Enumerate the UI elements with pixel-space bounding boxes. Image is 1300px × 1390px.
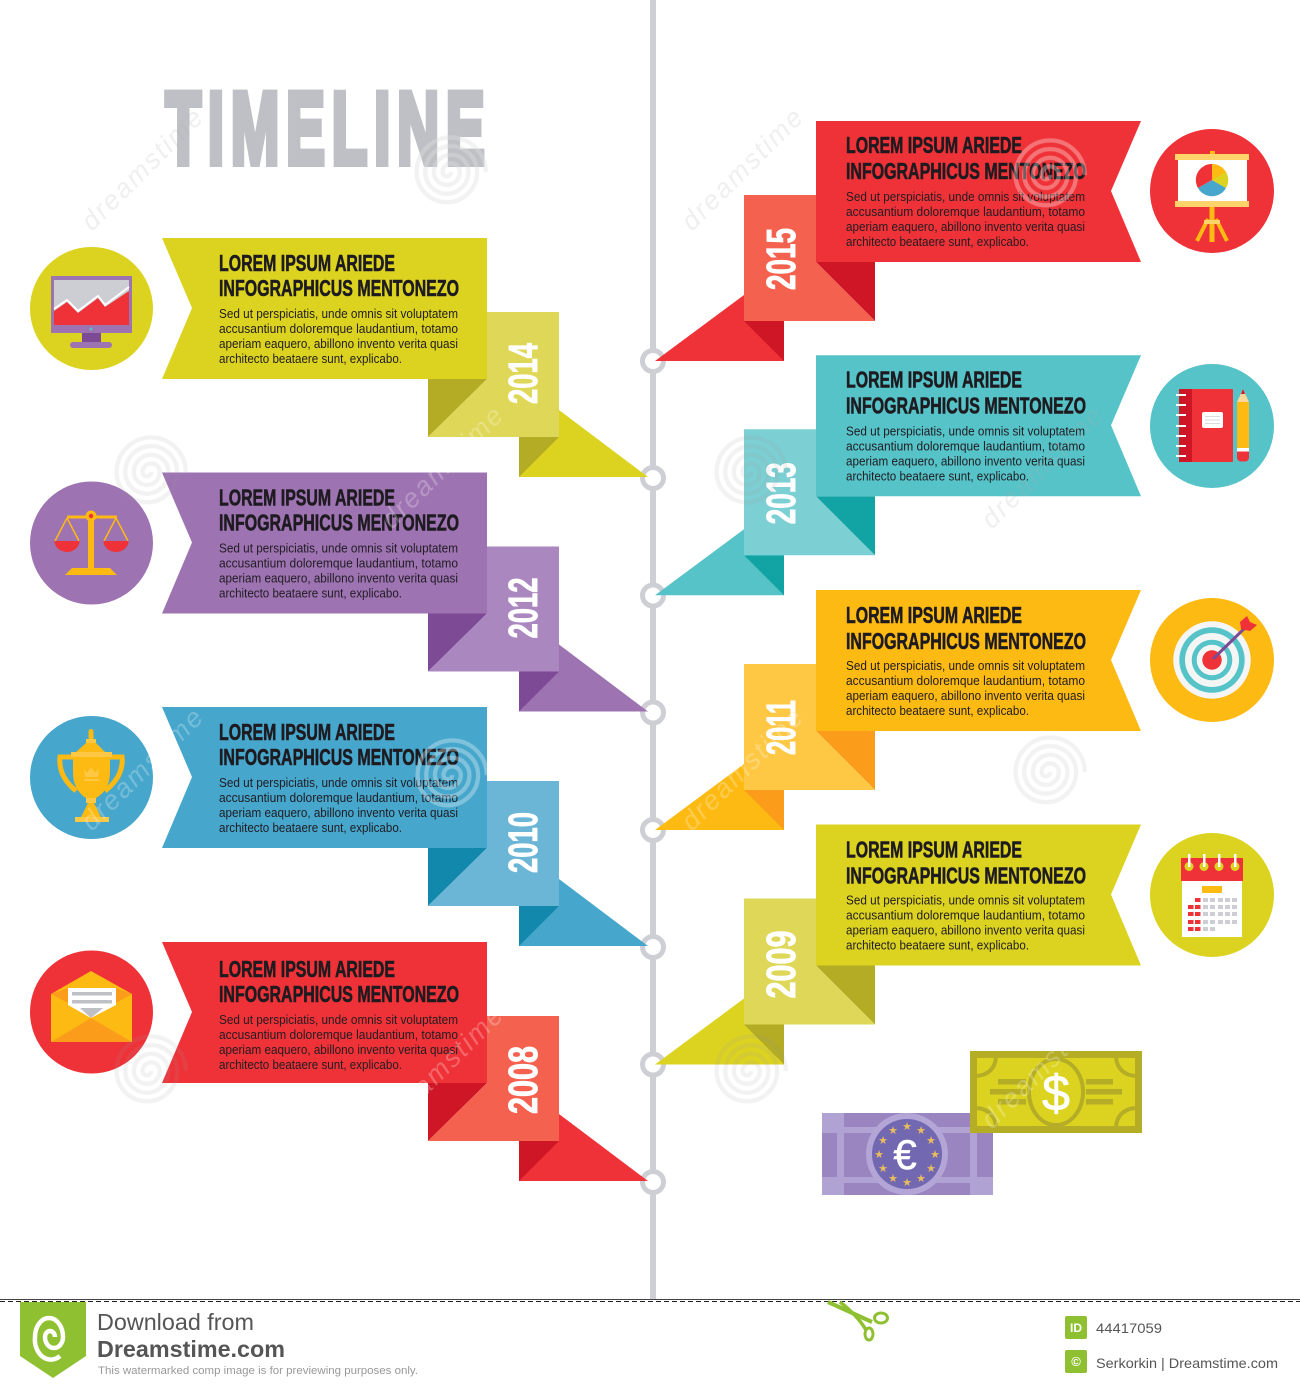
body text: aperiam eaquero, abillono invento verita quasi	[846, 924, 1085, 938]
icon: euro banknote: ★	[874, 1148, 884, 1161]
milestone 2011	[655, 590, 1141, 830]
icon: euro banknote: ★	[916, 1172, 926, 1185]
body text: Sed ut perspiciatis, unde omnis sit voluptatem	[846, 424, 1085, 438]
heading: LOREM IPSUM ARIEDE	[846, 602, 1022, 628]
icon: euro banknote: ★	[878, 1134, 888, 1147]
body text: architecto beataere sunt, explicabo.	[846, 235, 1029, 249]
year tab	[744, 664, 875, 790]
icon: calendar	[1150, 833, 1274, 957]
body text: aperiam eaquero, abillono invento verita quasi	[219, 806, 458, 820]
body text: architecto beataere sunt, explicabo.	[846, 938, 1029, 952]
body text: accusantium doloremque laudantium, totamo	[219, 322, 458, 336]
body text: architecto beataere sunt, explicabo.	[846, 469, 1029, 483]
year: 2009	[758, 930, 804, 998]
heading: INFOGRAPHICUS MENTONEZO	[846, 862, 1086, 888]
heading	[846, 836, 1086, 888]
heading	[219, 250, 459, 301]
icon: dollar banknote	[970, 1051, 1142, 1133]
icon: euro banknote: ★	[926, 1162, 936, 1175]
year tab	[744, 898, 875, 1024]
icon: envelope	[30, 950, 153, 1074]
icon: euro banknote: ★	[902, 1176, 912, 1189]
body text: architecto beataere sunt, explicabo.	[219, 586, 402, 600]
ribbon fold	[816, 966, 875, 1024]
icon: notebook and pencil	[1150, 364, 1274, 488]
image credit	[1065, 1350, 1278, 1373]
body text: accusantium doloremque laudantium, totamo	[219, 556, 458, 570]
watermark text: dreamstime	[675, 101, 810, 236]
milestone 2015	[655, 121, 1141, 361]
heading: LOREM IPSUM ARIEDE	[846, 366, 1022, 392]
ribbon tail	[519, 1114, 648, 1181]
body text	[846, 424, 1085, 483]
timeline nodes	[642, 350, 664, 1192]
ribbon fold	[816, 496, 875, 555]
year tab	[428, 781, 559, 906]
body text: Sed ut perspiciatis, unde omnis sit voluptatem	[219, 776, 458, 790]
heading: INFOGRAPHICUS MENTONEZO	[846, 628, 1086, 654]
icon: scales	[30, 482, 153, 604]
milestone 2009	[655, 824, 1141, 1064]
body text: Sed ut perspiciatis, unde omnis sit voluptatem	[846, 190, 1085, 204]
watermark text: dreamstime	[75, 101, 210, 236]
footer download text	[97, 1309, 418, 1377]
body text: accusantium doloremque laudantium, totamo	[846, 908, 1085, 922]
body text: Sed ut perspiciatis, unde omnis sit voluptatem	[219, 1013, 458, 1027]
icon: euro banknote: ★	[902, 1120, 912, 1133]
body text	[846, 894, 1085, 952]
body text: aperiam eaquero, abillono invento verita quasi	[846, 454, 1085, 468]
heading: INFOGRAPHICUS MENTONEZO	[219, 981, 459, 1007]
body text: architecto beataere sunt, explicabo.	[219, 352, 402, 366]
heading: LOREM IPSUM ARIEDE	[219, 719, 395, 745]
milestone 2008	[162, 942, 648, 1181]
ribbon fold	[428, 379, 487, 437]
body text: Sed ut perspiciatis, unde omnis sit voluptatem	[219, 307, 458, 321]
ribbon banner	[162, 707, 487, 848]
year tab	[744, 195, 875, 321]
body text	[219, 542, 458, 600]
year tab	[428, 312, 559, 437]
year: 2014	[500, 343, 546, 404]
heading: LOREM IPSUM ARIEDE	[219, 956, 395, 982]
body text	[219, 776, 458, 835]
image id: ID	[1070, 1321, 1082, 1335]
body text	[219, 1013, 458, 1072]
heading: LOREM IPSUM ARIEDE	[846, 836, 1022, 862]
body text: architecto beataere sunt, explicabo.	[219, 821, 402, 835]
ribbon banner	[816, 824, 1141, 966]
milestone 2010	[162, 707, 648, 946]
heading: INFOGRAPHICUS MENTONEZO	[219, 744, 459, 770]
watermark text: dreamstime	[375, 399, 510, 534]
body text: accusantium doloremque laudantium, totamo	[219, 791, 458, 805]
heading: LOREM IPSUM ARIEDE	[219, 484, 395, 510]
ribbon tail	[655, 998, 784, 1064]
ribbon fold	[816, 731, 875, 790]
icon: euro banknote: ★	[930, 1148, 940, 1161]
ribbon tail	[655, 529, 784, 595]
year: 2013	[758, 462, 804, 524]
year tab	[428, 546, 559, 672]
ribbon tail	[519, 879, 648, 946]
footer download text: Dreamstime.com	[97, 1336, 285, 1362]
heading: LOREM IPSUM ARIEDE	[846, 132, 1022, 158]
heading	[846, 366, 1086, 418]
ribbon tail	[655, 764, 784, 830]
timeline axis	[650, 0, 656, 1300]
body text: aperiam eaquero, abillono invento verita quasi	[219, 337, 458, 351]
milestone 2012	[162, 472, 648, 712]
ribbon tail	[519, 410, 648, 477]
image credit: Serkorkin | Dreamstime.com	[1096, 1355, 1278, 1371]
image id	[1065, 1316, 1162, 1339]
icon: euro banknote: €	[893, 1131, 917, 1178]
body text: aperiam eaquero, abillono invento verita quasi	[846, 220, 1085, 234]
body text: Sed ut perspiciatis, unde omnis sit voluptatem	[846, 659, 1085, 673]
body text: accusantium doloremque laudantium, totamo	[219, 1028, 458, 1042]
ribbon tail	[519, 644, 648, 712]
heading: INFOGRAPHICUS MENTONEZO	[219, 275, 459, 301]
icon: euro banknote: ★	[916, 1124, 926, 1137]
heading: INFOGRAPHICUS MENTONEZO	[846, 392, 1086, 418]
body text: accusantium doloremque laudantium, totamo	[846, 205, 1085, 219]
ribbon fold	[428, 1083, 487, 1141]
body text: architecto beataere sunt, explicabo.	[219, 1058, 402, 1072]
icon: target	[1150, 598, 1274, 722]
icon: euro banknote: ★	[888, 1172, 898, 1185]
body text: Sed ut perspiciatis, unde omnis sit voluptatem	[219, 542, 458, 556]
body text: aperiam eaquero, abillono invento verita quasi	[846, 689, 1085, 703]
milestone 2013	[655, 355, 1141, 595]
ribbon fold	[428, 614, 487, 672]
ribbon banner	[816, 590, 1141, 731]
body text: accusantium doloremque laudantium, totamo	[846, 439, 1085, 453]
body text: accusantium doloremque laudantium, totamo	[846, 674, 1085, 688]
ribbon fold	[428, 848, 487, 906]
heading: INFOGRAPHICUS MENTONEZO	[219, 510, 459, 536]
year: 2011	[758, 700, 804, 755]
ribbon banner	[162, 942, 487, 1083]
watermark spirals	[117, 137, 1085, 1101]
footer download text: Download from	[97, 1309, 254, 1335]
icon: monitor	[30, 247, 153, 370]
body text: architecto beataere sunt, explicabo.	[846, 704, 1029, 718]
footer download text: This watermarked comp image is for previewing purposes only.	[98, 1365, 418, 1377]
watermark text: dreamstime	[975, 399, 1110, 534]
milestone 2014	[162, 238, 648, 477]
image id: 44417059	[1096, 1320, 1162, 1336]
body text	[846, 659, 1085, 718]
year: 2012	[500, 578, 546, 638]
body text: aperiam eaquero, abillono invento verita quasi	[219, 1043, 458, 1057]
year: 2015	[758, 228, 804, 290]
icon: scissors	[828, 1302, 888, 1340]
heading	[846, 132, 1086, 184]
ribbon banner	[162, 472, 487, 614]
ribbon banner	[816, 121, 1141, 262]
ribbon banner	[162, 238, 487, 379]
watermark text: dreamstime	[75, 701, 210, 836]
heading	[219, 484, 459, 536]
icon: euro banknote	[822, 1113, 993, 1195]
heading	[219, 956, 459, 1007]
watermark text: dreamstime	[675, 701, 810, 836]
footer	[0, 1299, 1300, 1378]
icon: euro banknote: ★	[888, 1124, 898, 1137]
icon: euro banknote: ★	[926, 1134, 936, 1147]
year tab	[744, 429, 875, 555]
ribbon banner	[816, 355, 1141, 496]
ribbon fold	[816, 262, 875, 321]
footer badge	[20, 1302, 86, 1378]
year: 2008	[500, 1046, 546, 1114]
watermark text: dreamstime	[375, 999, 510, 1134]
watermark text: dreamstime	[975, 999, 1110, 1134]
watermark text	[75, 101, 1110, 1134]
heading: INFOGRAPHICUS MENTONEZO	[846, 158, 1086, 184]
ribbon tail	[655, 295, 784, 361]
year tab	[428, 1016, 559, 1141]
heading: LOREM IPSUM ARIEDE	[219, 250, 395, 276]
image credit: ©	[1071, 1354, 1081, 1369]
heading	[219, 719, 459, 770]
icon: trophy	[30, 716, 153, 839]
year: 2010	[500, 812, 546, 873]
heading	[846, 602, 1086, 654]
icon: presentation board	[1150, 129, 1274, 253]
title: TIMELINE	[166, 72, 492, 186]
body text	[846, 190, 1085, 249]
body text	[219, 307, 458, 366]
icon: dollar banknote: $	[1042, 1065, 1070, 1121]
body text: aperiam eaquero, abillono invento verita quasi	[219, 572, 458, 586]
icon: euro banknote: ★	[878, 1162, 888, 1175]
body text: Sed ut perspiciatis, unde omnis sit voluptatem	[846, 894, 1085, 908]
